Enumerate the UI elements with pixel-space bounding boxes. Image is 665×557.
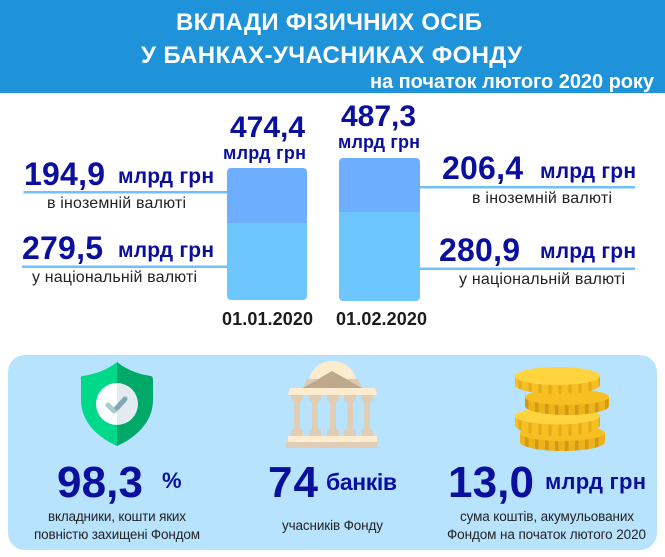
left foreign currency: в іноземній валюті: [47, 195, 186, 212]
total 01.01: млрд грн: [223, 143, 306, 163]
bottom panel: [8, 355, 657, 550]
right national currency: [439, 232, 636, 288]
subtitle: на початок лютого 2020 року: [370, 71, 655, 93]
stat: 13,0 bn UAH: [448, 458, 646, 507]
left national currency: [22, 230, 214, 286]
left foreign currency: млрд грн: [118, 165, 214, 188]
icon: coin stack: [515, 367, 609, 451]
right national currency: у національній валюті: [459, 271, 625, 288]
coin 2: [525, 389, 609, 415]
caption: depositors: вкладники, кошти яких: [48, 509, 186, 524]
right foreign currency: в іноземній валюті: [472, 190, 612, 207]
caption: accumulated funds: Фондом на початок лютого 2020: [447, 527, 646, 542]
date 01.02.2020: 01.02.2020: [336, 309, 427, 329]
stat: 13,0 bn UAH: млрд грн: [545, 469, 646, 494]
bar 01.01.2020: [227, 168, 307, 300]
date 01.01.2020: 01.01.2020: [222, 309, 313, 329]
left national currency: 279,5: [22, 230, 103, 266]
caption: depositors: [34, 509, 200, 542]
left foreign currency: [24, 156, 214, 212]
bar 01.02.2020: [339, 158, 420, 301]
icon: shield: [81, 362, 153, 446]
stat: 98,3 %: 98,3: [57, 458, 143, 507]
header banner: [0, 0, 665, 93]
leader lines right: [420, 186, 635, 270]
total 01.02: млрд грн: [338, 132, 420, 152]
right foreign currency: 206,4: [442, 150, 523, 186]
stat: 74 banks: 74: [268, 458, 319, 507]
right national currency: млрд грн: [540, 240, 636, 263]
total 01.01: [223, 111, 306, 163]
stat: 98,3 %: [57, 458, 182, 507]
icon: bank building: [286, 361, 378, 448]
coin 4: [520, 425, 605, 451]
caption: fund participants: учасників Фонду: [282, 518, 383, 533]
total 01.02: [338, 100, 420, 152]
right foreign currency: [442, 150, 636, 207]
right foreign currency: млрд грн: [540, 160, 636, 183]
left national currency: млрд грн: [118, 239, 214, 262]
stat: 98,3 %: %: [162, 468, 182, 493]
stat: 74 banks: банків: [326, 469, 397, 495]
coin 1: [515, 367, 600, 394]
total 01.01: 474,4: [230, 111, 305, 144]
leader lines left: [22, 191, 228, 268]
stat: 74 banks: [268, 458, 397, 507]
caption: accumulated funds: [447, 509, 646, 542]
coin 3: [515, 408, 600, 436]
left foreign currency: 194,9: [24, 156, 105, 192]
total 01.02: 487,3: [341, 100, 416, 133]
right national currency: 280,9: [439, 232, 520, 268]
stat: 13,0 bn UAH: 13,0: [448, 458, 534, 507]
title line 1: ВКЛАДИ ФІЗИЧНИХ ОСІБ: [176, 9, 482, 36]
caption: depositors: повністю захищені Фондом: [34, 527, 200, 542]
title line 2: У БАНКАХ-УЧАСНИКАХ ФОНДУ: [141, 42, 523, 69]
caption: accumulated funds: сума коштів, акумульованих: [460, 509, 634, 524]
left national currency: у національній валюті: [32, 269, 197, 286]
